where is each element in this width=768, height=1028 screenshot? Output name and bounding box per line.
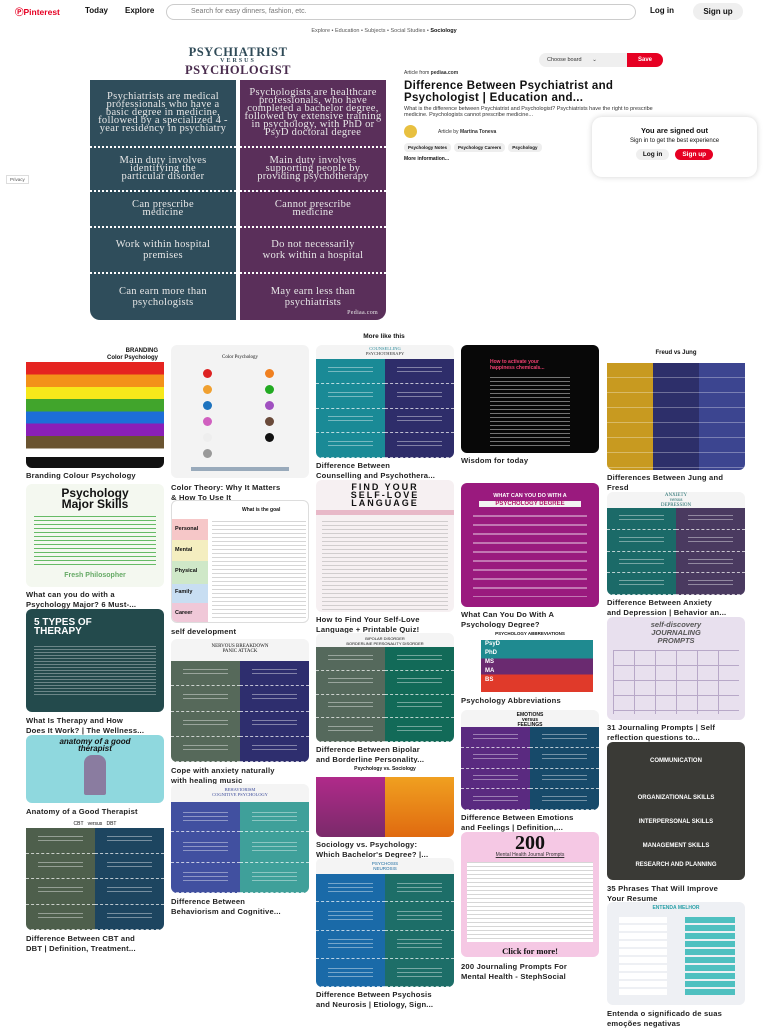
caption: Which Bachelor's Degree? |... [316,850,428,858]
tile: anatomy of a good therapist [26,735,164,803]
tile: branding color psychology: BRANDING [126,348,158,354]
tile: resume phrases: INTERPERSONAL SKILLS [639,819,713,825]
tile: psychology abbreviations: MA [485,668,494,674]
right column: Pediaa.com [347,310,378,316]
signup button: Sign up [703,7,733,16]
caption [607,884,718,902]
left column: Can prescribe medicine [132,199,194,218]
author avatar [404,125,417,138]
caption: Does It Work? | The Wellness... [26,726,144,734]
caption: Counselling and Psychothera... [316,470,435,480]
tile: journaling prompts: PROMPTS [657,636,695,645]
tile: anxiety vs depression [607,492,745,595]
caption: Your Resume [607,894,658,902]
tile: resume phrases [607,742,745,880]
right column: Do not necessarily work within a hospital [263,239,363,261]
nav: explore: Explore [125,6,154,15]
caption [171,483,280,502]
tile: journaling prompts [607,617,745,720]
tile: 200 journal prompts [461,832,599,957]
tile: psychology major skills: Psychology [61,486,129,500]
tile: CBT vs DBT [26,819,164,930]
caption [607,723,715,742]
tile: psychology abbreviations: BS [485,677,493,683]
article description: What is the difference between Psychiatrist and Psychologist? Psychiatrists have the right to prescribe medicine. Psychologists cannot prescribe medicine... [404,106,653,118]
tile: psychology degree [461,483,599,607]
tile: psychology abbreviations: PSYCHOLOGY ABBREVIATIONS [495,631,565,636]
caption: Branding Colour Psychology [26,471,136,480]
tile: bipolar vs borderline: BIPOLAR DISORDER [365,636,405,641]
tile: color psychology: Color Psychology [222,355,258,360]
article source: Article from pediaa.com [404,70,458,76]
caption [316,615,420,634]
signup button [693,3,743,20]
tile: psychology degree: PSYCHOLOGY DEGREE [495,501,565,507]
search box [166,4,636,20]
search box: Search for easy dinners, fashion, etc. [191,8,307,15]
tile: find your self-love language [316,480,454,612]
signed out popup: Log in [643,150,662,158]
tile: resume phrases: COMMUNICATION [650,758,702,764]
right column [240,80,386,320]
tile: psychosis vs neurosis: PSYCHOSIS [372,861,398,866]
article title: Difference Between Psychiatrist and Psychologist | Education and... [404,80,613,104]
caption [607,598,726,616]
tile: self development: Career [175,610,192,616]
tile: psychology major skills: Fresh Philosopher [64,572,126,579]
caption [26,716,144,734]
tile: entenda melhor: ENTENDA MELHOR [652,905,700,911]
tile: psychology abbreviations: PsyD [485,641,500,647]
right column: Psychologists are healthcare professionals, who have completed a bachelor degree, followed by extensive training in psychology, with PhD or PsyD doctoral degree [244,87,382,138]
caption [316,745,424,764]
caption: DBT | Definition, Treatment... [26,944,136,952]
caption [461,813,574,832]
left column: Main duty involves identifying the particular disorder [119,155,207,182]
caption: What Can You Do With A [461,610,554,619]
tile: color psychology [171,345,309,478]
tile: 5 types of therapy [26,609,164,712]
tile: wisdom for today: happiness chemicals... [490,365,544,371]
pin title [185,45,291,77]
tile: psychosis vs neurosis: NEUROSIS [373,866,397,871]
caption: 200 Journaling Prompts For [461,962,567,971]
caption: Difference Between [316,461,390,470]
caption: Sociology vs. Psychology: [316,840,417,849]
board chooser: Choose board ⌄ [547,57,597,63]
caption: & How To Use It [171,492,231,502]
caption [316,990,433,1008]
tile: psychology abbreviations [461,628,599,692]
tile: bipolar vs borderline: BORDERLINE PERSONALITY DISORDER [346,641,424,646]
caption: and Depression | Behavior an... [607,608,726,616]
signed out popup: You are signed out [641,126,708,135]
caption: Difference Between Bipolar [316,745,420,754]
left column: Psychiatrists are medical professionals who have a basic degree in medicine, followed by a specialized 4 - year residency in psychiatry [98,91,228,134]
tile: counselling vs psychotherapy [316,345,454,458]
right column: Main duty involves supporting people by providing psychotherapy [257,155,369,182]
tile: branding color psychology [26,345,164,468]
tile: anxiety vs depression: ANXIETY [665,493,687,498]
privacy: Privacy [10,177,25,182]
tile: find your self-love language: LANGUAGE [351,498,419,508]
signed out popup [592,117,757,177]
tile: anatomy of a good therapist: anatomy of a good [59,737,131,746]
caption: and Neurosis | Etiology, Sign... [316,1000,433,1008]
caption [26,934,136,952]
save button [627,53,663,67]
tile: branding color psychology: Color Psychology [107,355,158,361]
caption: with healing music [171,776,243,784]
caption: 31 Journaling Prompts | Self [607,723,715,732]
caption: Anatomy of a Good Therapist [26,807,138,816]
tile: anxiety vs depression: DEPRESSION [661,503,691,508]
caption: Difference Between Anxiety [607,598,712,607]
caption: Difference Between [171,897,245,906]
breadcrumb: Explore • Education • Subjects • Social Studies • Sociology [311,28,457,34]
caption: Cope with anxiety naturally [171,766,275,775]
privacy [6,175,29,184]
tile: self development: Family [175,589,192,595]
tile: emotions vs feelings [461,710,599,810]
pin title: VERSUS [220,58,256,64]
caption: Difference Between CBT and [26,934,135,943]
tags [404,143,542,152]
left column: Work within hospital premises [116,239,210,261]
tile: psychology degree: WHAT CAN YOU DO WITH A [493,493,567,499]
right column: Cannot prescribe medicine [275,199,351,218]
caption: self development [171,627,236,636]
caption [607,473,723,492]
caption: Differences Between Jung and [607,473,723,482]
caption: 35 Phrases That Will Improve [607,884,718,893]
caption: How to Find Your Self-Love [316,615,420,624]
caption: What Is Therapy and How [26,716,123,725]
tile: CBT vs DBT: CBT versus DBT [74,821,116,827]
tile: psychology abbreviations: MS [485,659,494,665]
tile: journaling prompts: JOURNALING [651,628,701,637]
tile: nervous breakdown vs panic attack [171,639,309,762]
signed out popup: Sign in to get the best experience [630,138,719,144]
caption: Psychology Abbreviations [461,696,561,705]
tile: self development: Mental [175,547,192,553]
tile: self development: Physical [175,568,197,574]
logo: ⓅPinterest [15,7,60,17]
caption [316,840,428,858]
tile: emotions vs feelings: FEELINGS [517,722,542,728]
tile: behaviorism vs cognitive: BEHAVIORISM [225,787,255,792]
tile: self development: What is the goal [242,507,280,513]
tile: resume phrases: RESEARCH AND PLANNING [635,862,717,868]
tile: behaviorism vs cognitive [171,784,309,893]
caption [316,461,435,480]
tile: bipolar vs borderline [316,633,454,742]
caption: Entenda o significado de suas [607,1009,722,1018]
caption [171,897,281,916]
tile: wisdom for today [461,345,599,453]
left column [90,80,236,320]
login link: Log in [650,6,674,15]
tile: journaling prompts: self-discovery [651,620,701,629]
caption: Behaviorism and Cognitive... [171,906,281,916]
tile: nervous breakdown vs panic attack: NERVOUS BREAKDOWN [212,644,268,649]
tile: 200 journal prompts: Click for more! [502,946,558,956]
caption [607,1009,722,1028]
caption: reflection questions to... [607,732,700,742]
tile: emotions vs feelings: versus [522,717,538,723]
tile: behaviorism vs cognitive: COGNITIVE PSYCHOLOGY [212,792,268,797]
tile: psychosis vs neurosis [316,858,454,987]
tile: counselling vs psychotherapy: COUNSELLING [369,346,401,351]
tile: find your self-love language: SELF-LOVE [351,490,419,500]
caption: Color Theory: Why It Matters [171,483,280,492]
tile: wisdom for today: How to activate your [490,359,539,365]
tile: self development: Personal [175,526,198,532]
caption: and Borderline Personality... [316,754,424,764]
main pin: psychiatrist vs psychologist [90,45,386,320]
tile: anxiety vs depression: versus [670,498,682,503]
tile: psychology major skills: Major Skills [62,497,128,511]
tile: freud vs jung [607,345,745,470]
tile: psychology vs sociology: Psychology vs. Sociology [354,766,416,772]
tile: 5 types of therapy: THERAPY [34,626,82,637]
tile: emotions vs feelings: EMOTIONS [517,712,543,718]
tile: 200 journal prompts: Mental Health Journal Prompts [496,852,564,858]
caption: What can you do with a [26,590,115,599]
tags: Psychology Notes [408,145,447,150]
pin title: PSYCHIATRIST [189,45,287,59]
caption [171,766,275,784]
caption: Language + Printable Quiz! [316,624,419,634]
caption: Psychology Major? 6 Must-... [26,600,136,608]
pin title: PSYCHOLOGIST [185,63,291,77]
header bar [15,3,743,20]
more information: More information... [404,156,449,162]
signed out popup: Sign up [682,150,706,158]
save button: Save [638,57,652,63]
tile: entenda melhor [607,902,745,1005]
board chooser [539,53,627,67]
caption [461,962,567,980]
caption: Difference Between Psychosis [316,990,432,999]
caption [26,590,136,608]
caption [461,610,554,628]
left column: Can earn more than psychologists [119,286,207,308]
right column: May earn less than psychiatrists [271,286,355,308]
caption: Difference Between Emotions [461,813,574,822]
caption: Psychology Degree? [461,620,540,628]
tile: find your self-love language: FIND YOUR [351,482,419,492]
caption: Fresd [607,482,629,492]
tile: nervous breakdown vs panic attack: PANIC ATTACK [223,649,257,654]
nav: today: Today [85,6,108,15]
tile: psychology abbreviations: PhD [485,650,497,656]
tile: resume phrases: MANAGEMENT SKILLS [643,843,709,849]
caption: and Feelings | Definition,... [461,822,563,832]
caption: emoções negativas [607,1018,680,1028]
tile: freud vs jung: Freud vs Jung [655,350,696,356]
tile: psychology vs sociology [316,763,454,837]
caption: Mental Health - StephSocial [461,972,566,980]
tile: anatomy of a good therapist: therapist [78,744,112,753]
tile: resume phrases: ORGANIZATIONAL SKILLS [638,795,714,801]
tags: Psychology [512,145,538,150]
tags: Psychology Careers [458,145,501,150]
tile: 5 types of therapy: 5 TYPES OF [34,617,92,628]
tile: self development [171,500,309,623]
tile: psychology major skills [26,484,164,587]
tile: counselling vs psychotherapy: PSYCHOTHERAPY [366,351,404,356]
author: Article by Martina Toneva [438,129,496,135]
caption: Wisdom for today [461,456,528,465]
tile: 200 journal prompts: 200 [515,832,545,854]
more like this heading: More like this [363,333,405,340]
